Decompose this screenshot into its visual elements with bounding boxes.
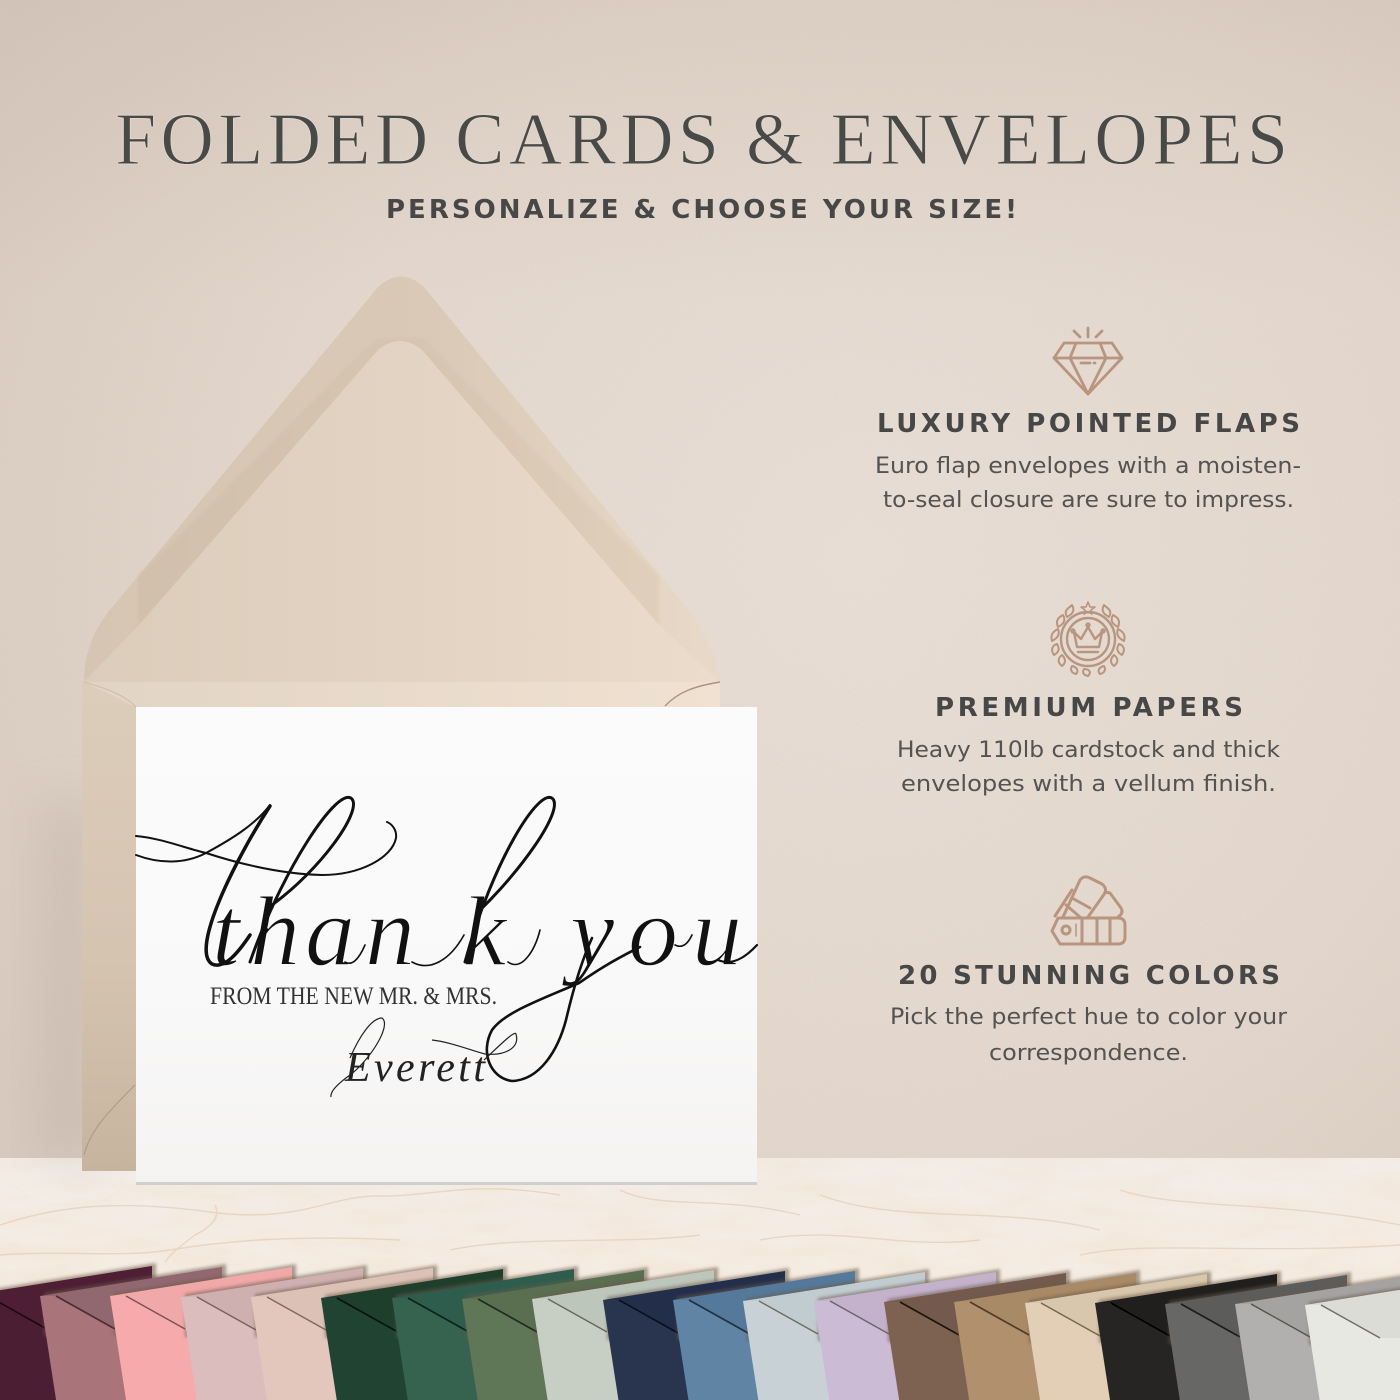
heading: PREMIUM PAPERS [935,693,1243,723]
swatch 11 blue [673,1268,859,1400]
title: FOLDED CARDS & ENVELOPES [115,99,1288,181]
flap liner [84,341,720,682]
subtitle: PERSONALIZE & CHOOSE YOUR SIZE! [386,195,1017,225]
swatch 3 pink [110,1264,296,1400]
description: Euro flap envelopes with a moisten- [875,453,1301,479]
swatch 4 rose [181,1265,367,1400]
feature: luxury pointed flaps: to-seal closure are sure to impress. [883,487,1294,513]
feature: luxury pointed flaps [875,328,1301,513]
swatch 17 black [1095,1271,1281,1400]
feature: premium papers: envelopes with a vellum finish. [901,771,1276,797]
swatch 20 white [1305,1273,1400,1400]
envelope back side [82,682,138,1171]
feature: premium papers [897,602,1280,797]
swatch 14 brown [884,1270,1070,1400]
swatch 8 olive [462,1267,648,1400]
swatch 16 cream [1025,1271,1211,1400]
heading: 20 STUNNING COLORS [898,961,1280,991]
from line: FROM THE NEW MR. & MRS. [210,983,497,1010]
swatch 13 lilac [814,1269,1000,1400]
feature: stunning colors [890,877,1288,1066]
swatch 19 silver [1235,1272,1400,1400]
swatch 2 mauve [40,1264,226,1400]
icon: colour fan [1052,877,1125,944]
signature flourish [331,1018,517,1097]
marble counter [0,1158,1400,1400]
flap liner band [138,338,659,626]
card shadow edge [136,1180,757,1185]
swatch 7 teal [392,1266,578,1400]
description: Heavy 110lb cardstock and thick [897,737,1280,763]
thank you card [136,707,757,1185]
swatch 18 grey [1165,1272,1351,1400]
description: Pick the perfect hue to color your [890,1004,1288,1030]
swatch 5 blush [251,1265,437,1400]
signature name: Everett [344,1045,486,1091]
swatch 12 pale blue [743,1269,929,1400]
icon: diamond [1054,328,1122,394]
envelope pointed flap [84,276,720,682]
swatch 10 navy [603,1268,789,1400]
icon: crown medal [1051,602,1125,676]
envelope [82,276,720,1171]
swatch 1 wine [0,1263,156,1400]
wall shadow beside envelope [40,800,100,1160]
swatch 6 forest [321,1266,507,1400]
feature: stunning colors: correspondence. [989,1040,1188,1066]
script flourishes [136,797,757,1081]
envelope colour swatches [0,1263,1400,1400]
script greeting: thank you [212,876,742,987]
swatch 9 sage [532,1267,718,1400]
heading: LUXURY POINTED FLAPS [877,409,1300,439]
card face [136,707,757,1182]
envelope front strip [84,682,720,707]
swatch 15 tan [954,1270,1140,1400]
